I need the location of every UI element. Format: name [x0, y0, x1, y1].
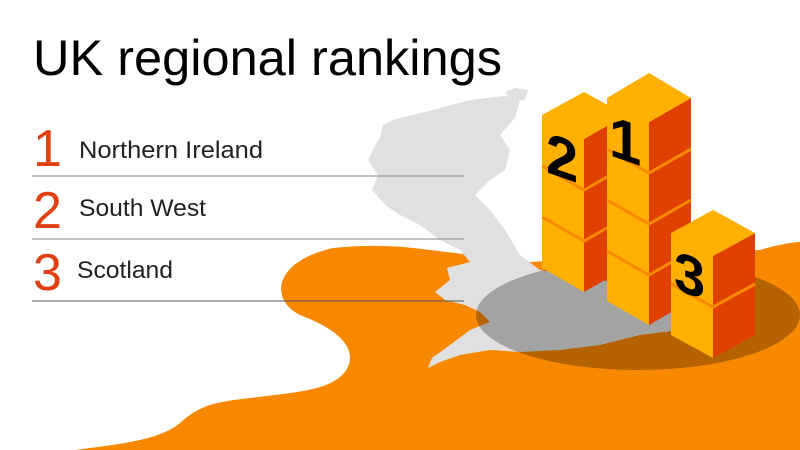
rank 3: Scotland	[77, 257, 173, 284]
rank 2	[33, 182, 206, 240]
rank 1	[33, 120, 263, 178]
title: UK regional rankings	[33, 30, 502, 86]
rank 2: 2	[33, 182, 62, 240]
map of Great Britain	[368, 88, 680, 368]
rank 2: South West	[79, 195, 206, 222]
label 2: 2	[546, 120, 578, 196]
rank 1: Northern Ireland	[79, 137, 263, 164]
rank 1: 1	[33, 120, 62, 178]
tower 3	[671, 210, 755, 358]
label 1: 1	[609, 103, 641, 179]
tower 2	[542, 92, 626, 292]
ranking list	[32, 120, 464, 302]
shadow ellipse	[476, 260, 800, 370]
label 3: 3	[674, 239, 705, 313]
tower 1	[607, 73, 691, 325]
orange background shape	[75, 242, 800, 450]
rank 3: 3	[33, 244, 62, 302]
rank 3	[33, 244, 173, 302]
